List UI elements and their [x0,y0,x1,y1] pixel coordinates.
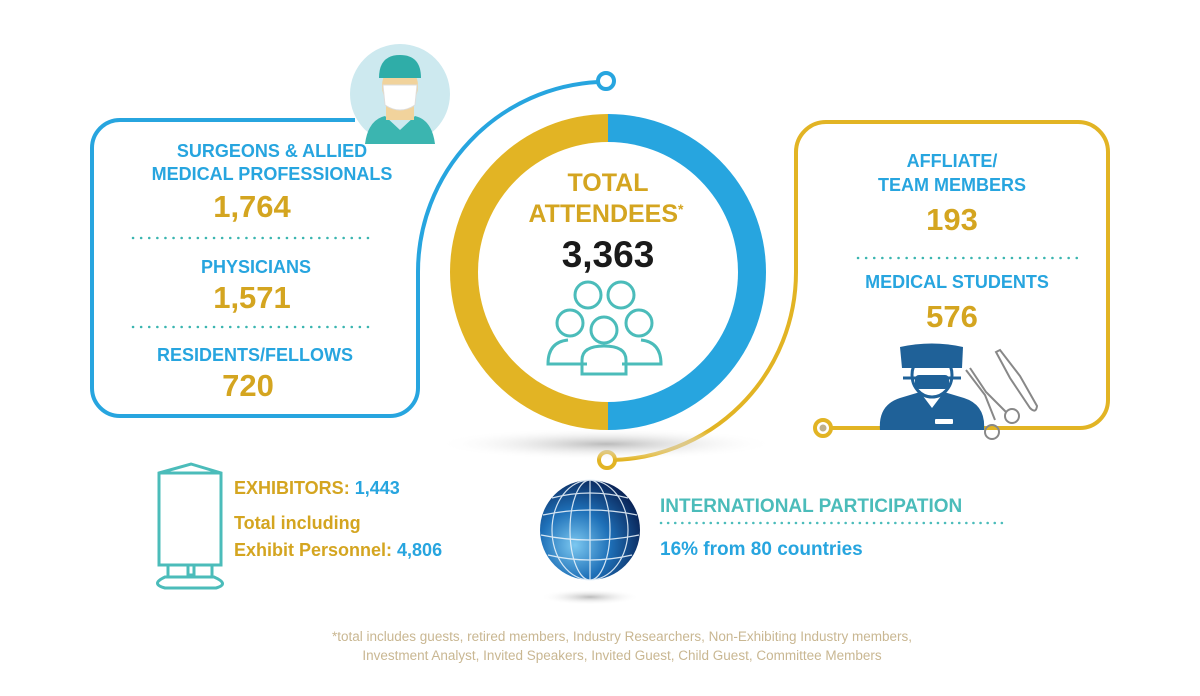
text: total attendees: TOTAL [567,169,649,197]
text: right stats: TEAM MEMBERS [878,175,1026,195]
icon: people group [548,282,661,374]
footnote [332,629,912,663]
text: exhibitors: EXHIBITORS: 1,443 [234,478,400,498]
panel: right box with gold connector [599,122,1108,468]
text: international participation [660,496,1005,560]
text: right stats [858,151,1080,334]
text: exhibitors [234,478,442,560]
text: total attendees: ATTENDEES [528,200,678,228]
text: left stats: RESIDENTS/FELLOWS [157,345,353,365]
icon: exhibitor banner stand [158,464,223,588]
text: left stats: 1,764 [213,189,292,224]
text: total attendees: * [678,201,684,217]
text: right stats: 576 [926,299,978,334]
text: international participation: INTERNATIONAL PARTICIPATION [660,496,962,517]
text: left stats: MEDICAL PROFESSIONALS [152,164,392,184]
text: international participation: 16% from 80 countries [660,539,863,560]
text: total attendees [528,169,684,275]
text: left stats [133,141,392,403]
text: left stats: 1,571 [213,280,291,315]
panel: left box with blue connector [92,73,614,416]
icon: medical student with tools [880,344,1037,439]
text: left stats: 720 [222,368,274,403]
shadow under ring [436,428,776,460]
icon: globe [540,480,640,605]
text: left stats: SURGEONS & ALLIED [177,141,367,161]
footnote: *total includes guests, retired members, Industry Researchers, Non-Exhibiting Industry members, [332,629,912,644]
text: exhibitors: Total including [234,513,361,533]
chart: total attendees ring [450,114,766,430]
text: right stats: AFFLIATE/ [907,151,997,171]
footnote: Investment Analyst, Invited Speakers, Invited Guest, Child Guest, Committee Members [362,648,882,663]
text: left stats: PHYSICIANS [201,257,311,277]
text: right stats: 193 [926,202,978,237]
text: total attendees: 3,363 [562,234,654,275]
icon: surgeon avatar [350,44,450,144]
text: right stats: MEDICAL STUDENTS [865,272,1049,292]
text: exhibitors: Exhibit Personnel: 4,806 [234,540,442,560]
